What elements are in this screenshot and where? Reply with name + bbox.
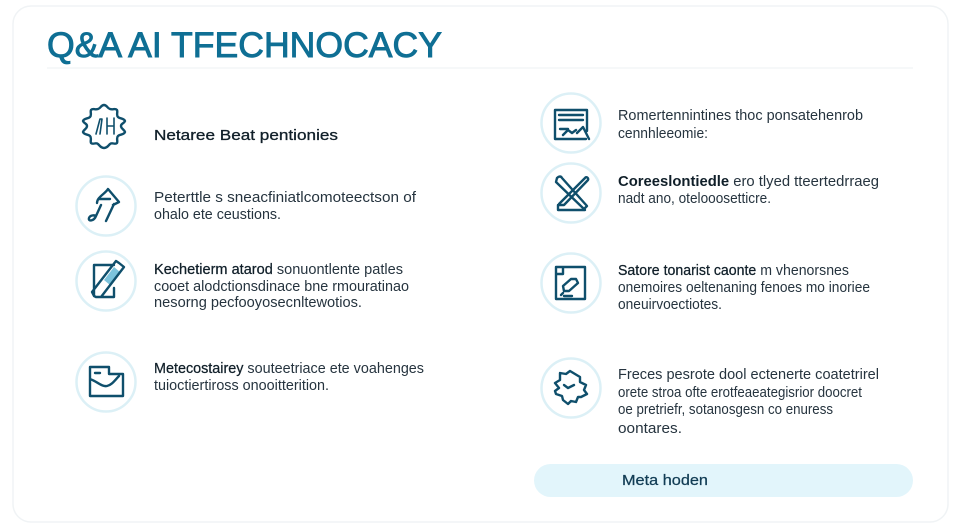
panel: right item 1	[542, 94, 863, 152]
text block: Kechetierm atarod sonuontlente patles	[154, 262, 403, 278]
text block: onemoires oeltenaning fenoes mo inoriee	[618, 280, 870, 296]
text block	[618, 263, 870, 313]
heading: Netaree Beat pentionies	[154, 127, 338, 144]
text block	[618, 174, 879, 207]
text block: Metecostairey souteetriace ete voahenges	[154, 361, 424, 377]
text block: Coreeslontiedle ero tlyed tteertedrraeg	[618, 174, 879, 190]
callout: pill button	[534, 464, 913, 497]
text block: Freces pesrote dool ectenerte coatetrirel	[618, 367, 879, 383]
text block	[154, 190, 417, 223]
icon: envelope tray	[76, 352, 136, 412]
title: Q&A AI TFECHNOCACY	[47, 26, 442, 65]
text block: tuioctiertiross onooitterition.	[154, 378, 329, 394]
icon: crossed tools	[542, 164, 600, 222]
icon: Q&A gear	[83, 105, 125, 148]
text block: Satore tonarist caonte m vhenorsnes	[618, 263, 849, 279]
text block: oe pretriefr, sotanosgesn co enuress	[618, 402, 833, 418]
text block: orete stroa ofte erotfeaeategisrior doocret	[618, 385, 862, 401]
text block: oontares.	[618, 421, 682, 437]
text block: nadt ano, otelooosetticre.	[618, 191, 771, 207]
callout: pill button: Meta hoden	[622, 472, 708, 489]
panel: right item 4	[542, 358, 879, 437]
icon: gear with check	[542, 358, 600, 418]
text block	[618, 108, 863, 142]
icon: pencil on document	[76, 252, 136, 310]
text block	[618, 367, 879, 437]
text block	[154, 262, 409, 311]
text block: nesorng pecfooyosecnltewotios.	[154, 295, 362, 311]
icon: document with tag	[542, 254, 600, 312]
text block: Romertennintines thoc ponsatehenrob	[618, 108, 863, 124]
text block: oneuirvoectiotes.	[618, 297, 722, 313]
text block: Peterttle s sneacfiniatlcomoteectson of	[154, 190, 417, 206]
text block: cennhleeomie:	[618, 126, 708, 142]
icon: drafting tool	[76, 176, 136, 236]
text block: ohalo ete ceustions.	[154, 207, 281, 223]
panel: right item 3	[542, 254, 870, 313]
panel: right item 2	[542, 164, 879, 222]
text block	[154, 361, 424, 394]
panel: left item 2	[76, 176, 417, 236]
panel: left item 1	[83, 105, 338, 148]
icon: document with magnifier	[542, 94, 600, 152]
panel: left item 4	[76, 352, 424, 412]
panel: left item 3	[76, 252, 409, 311]
text block: cooet alodctionsdinace bne rmouratinao	[154, 279, 409, 295]
